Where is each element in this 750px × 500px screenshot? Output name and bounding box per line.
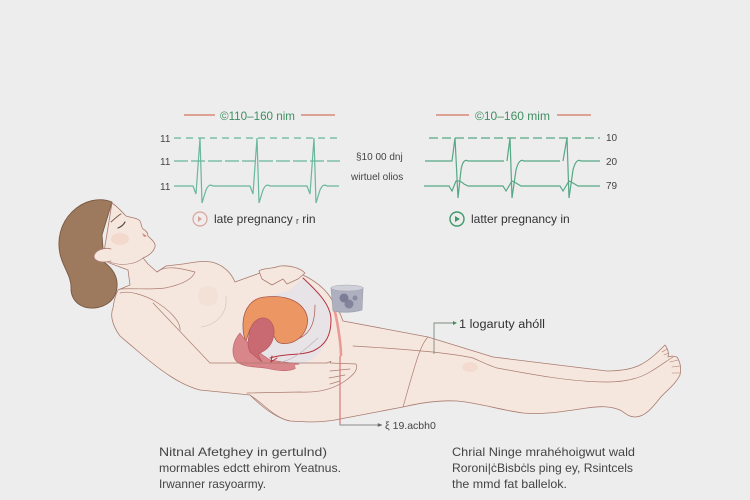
- axis labels: right: 10: [606, 133, 618, 144]
- chest and arm lines: [120, 268, 195, 289]
- outer uterine wall: [233, 333, 299, 371]
- text block: left description: Irwanner rasyoarmy.: [159, 477, 266, 491]
- illustration: reclining pregnant woman: [59, 200, 681, 422]
- axis labels: left: 11: [160, 182, 171, 193]
- trace: left: [174, 138, 340, 203]
- caption: latter pregnancy: latter pregnancy in: [471, 212, 570, 226]
- trace: right: [424, 138, 600, 198]
- caption: late pregnancy: late pregnancy ᵣ rin: [214, 212, 316, 226]
- axis labels: right: [606, 133, 618, 192]
- body and legs: [103, 203, 681, 422]
- panel: centre note: [350, 152, 403, 183]
- panel: left heart rate chart: [160, 109, 340, 226]
- axis labels: left: [160, 134, 171, 193]
- hair: [59, 200, 117, 308]
- text block: right description: Roroni|ċBisbċls ping ey, Rsintcels: [452, 461, 633, 475]
- toes: [662, 349, 680, 373]
- chart heading: left: ©110–160 nim: [220, 109, 295, 123]
- chart heading: right: ©10–160 mim: [475, 109, 550, 123]
- arrow: lower callout: [340, 356, 382, 426]
- text block: right description: Chrial Ninge mrahéhoigwut wald: [452, 445, 635, 459]
- axis labels: right: 20: [606, 157, 618, 168]
- face details: [94, 214, 147, 264]
- text block: right description: the mmd fat ballelok.: [452, 477, 567, 491]
- text block: left description: Nitnal Afetghey in gertulnd): [159, 445, 327, 459]
- text block: left description: mormables edctt ehirom Yeatnus.: [159, 461, 341, 475]
- text block: right description: [452, 445, 635, 491]
- umbilical and vessel lines: [270, 278, 341, 362]
- hand on belly: [259, 266, 305, 285]
- arrow: upper callout: [434, 321, 457, 354]
- panel: centre note: wirtuel olios: [350, 172, 403, 183]
- callout: upper label: 1 logaruty ahóll: [459, 319, 545, 331]
- lower hand: [295, 362, 356, 392]
- icon: ultrasound transducer: [331, 285, 363, 312]
- leg lines: [353, 337, 673, 407]
- callout: lower label: ξ 19.acbh0: [385, 420, 436, 432]
- fetus: [248, 318, 274, 362]
- axis labels: right: 79: [606, 181, 618, 192]
- text block: left description: [159, 445, 341, 491]
- panel: centre note: §10 00 dnj: [356, 152, 403, 163]
- uterus sac: [240, 278, 330, 368]
- axis labels: left: 11: [160, 134, 171, 145]
- panel: right heart rate chart: [424, 109, 618, 226]
- axis labels: left: 11: [160, 157, 171, 168]
- placenta: [243, 297, 308, 344]
